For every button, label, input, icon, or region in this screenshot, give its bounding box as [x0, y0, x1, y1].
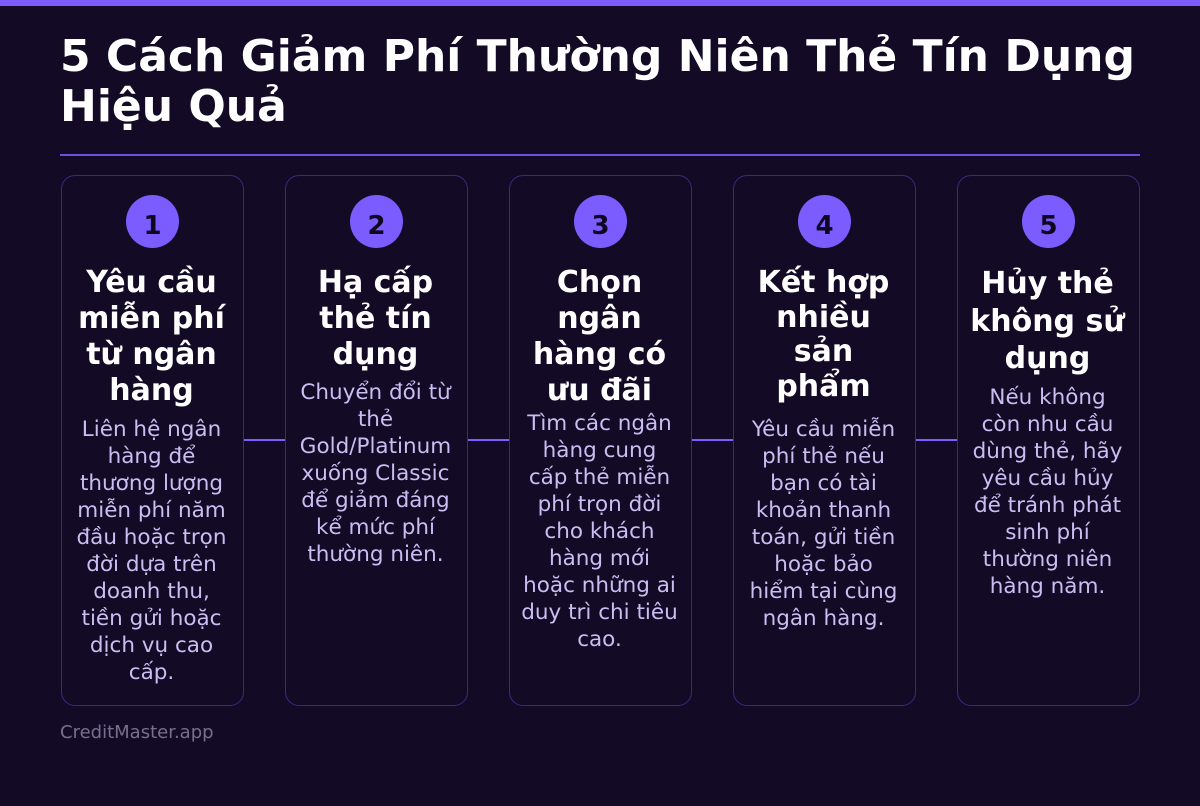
card 3 text: phí trọn đời — [538, 492, 661, 517]
panel: card 2 — [285, 175, 468, 706]
card 1 text: Liên hệ ngân — [82, 417, 221, 442]
card 1 text: thương lượng — [80, 471, 223, 496]
card 2 heading — [318, 265, 433, 372]
panel: card 5 — [957, 175, 1140, 706]
badge 5: 5 — [1039, 211, 1058, 241]
title — [60, 31, 1135, 132]
card 4 heading: sản — [794, 334, 853, 369]
card 1 heading: hàng — [109, 373, 194, 408]
card 1 heading: miễn phí — [78, 301, 225, 336]
card 1 text: miễn phí năm — [77, 498, 226, 523]
badge 3 — [574, 195, 627, 248]
card 5 heading — [970, 266, 1126, 376]
badge 5 — [1022, 195, 1075, 248]
panel: card 4 — [733, 175, 916, 706]
badge 1: 1 — [143, 211, 162, 241]
card 5 text: thường niên — [983, 547, 1112, 572]
card 1 text: cấp. — [129, 660, 174, 685]
card 1 text: hàng để — [108, 444, 195, 469]
card 5 text: dùng thẻ, hãy — [973, 439, 1122, 464]
card 2 text: thẻ — [358, 407, 393, 432]
badge 2 — [350, 195, 403, 248]
card 3 text: Tìm các ngân — [527, 411, 672, 436]
connector 1-2 — [244, 439, 285, 441]
card 4 text — [750, 417, 897, 631]
card 4 text: toán, gửi tiền — [752, 525, 895, 550]
card 5 heading: Hủy thẻ — [981, 266, 1114, 301]
card 3 heading: ngân — [557, 301, 642, 336]
card 4 heading: Kết hợp — [758, 265, 889, 300]
card 5 text: còn nhu cầu — [982, 412, 1113, 437]
card 3 text: hoặc những ai — [523, 573, 676, 598]
card 3 text: cấp thẻ miễn — [529, 465, 670, 490]
card 3 text: hàng mới — [549, 546, 650, 571]
card 1 text: doanh thu, — [93, 579, 210, 604]
card 4 text: hoặc bảo — [774, 552, 873, 577]
card 3 heading: hàng có — [533, 337, 666, 372]
card 2 text: Chuyển đổi từ — [300, 380, 451, 405]
card 5 text: yêu cầu hủy — [982, 466, 1113, 491]
card 5 heading: dụng — [1005, 341, 1090, 376]
card 4 text: phí thẻ nếu — [762, 444, 885, 469]
footer: CreditMaster.app — [60, 722, 214, 743]
card 2 text: Gold/Platinum — [300, 434, 451, 459]
card 2 text: kể mức phí — [316, 515, 435, 540]
card 4 heading — [758, 265, 889, 404]
card 5 text: để tránh phát — [974, 493, 1121, 518]
card 5 text: sinh phí — [1005, 520, 1090, 545]
badge 1 — [126, 195, 179, 248]
card 1 text: đời dựa trên — [86, 552, 217, 577]
panel: card 1 — [61, 175, 244, 706]
card 2 heading: dụng — [333, 337, 418, 372]
connector 4-5 — [916, 439, 957, 441]
card 5 text: Nếu không — [989, 385, 1106, 410]
card 1 text: tiền gửi hoặc — [82, 606, 221, 631]
card 5 heading: không sử — [970, 304, 1125, 338]
badge 4 — [798, 195, 851, 248]
card 1 heading: từ ngân — [86, 337, 217, 372]
title: 5 Cách Giảm Phí Thường Niên Thẻ Tín Dụng — [60, 31, 1135, 82]
card 4 text: Yêu cầu miễn — [752, 417, 895, 442]
title: Hiệu Quả — [60, 81, 287, 132]
panel: card 3 — [509, 175, 692, 706]
card 2 text — [300, 380, 452, 567]
card 2 text: xuống Classic — [302, 461, 449, 486]
card 4 heading: phẩm — [776, 368, 871, 404]
card 1 text — [77, 417, 226, 685]
card 2 heading: Hạ cấp — [318, 265, 433, 300]
card 3 text: cao. — [577, 627, 622, 652]
card 5 text: hàng năm. — [990, 574, 1105, 599]
card 3 text: hàng cung — [543, 438, 656, 463]
card 3 heading: ưu đãi — [547, 373, 652, 408]
card 2 text: thường niên. — [307, 542, 444, 567]
badge 3: 3 — [591, 211, 610, 241]
connector 2-3 — [468, 439, 509, 441]
card 1 text: đầu hoặc trọn — [77, 525, 226, 550]
card 3 heading — [533, 265, 666, 408]
card 1 text: dịch vụ cao — [90, 633, 213, 658]
card 1 heading: Yêu cầu — [86, 265, 217, 300]
badge 2: 2 — [367, 211, 386, 241]
card 2 heading: thẻ tín — [319, 301, 432, 336]
connector 3-4 — [692, 439, 733, 441]
card 4 heading: nhiều — [776, 300, 871, 334]
card 3 text — [521, 411, 678, 652]
card 3 text: cho khách — [544, 519, 655, 544]
card 4 text: bạn có tài — [770, 471, 877, 496]
card 3 heading: Chọn — [557, 265, 642, 300]
card 4 text: hiểm tại cùng — [750, 579, 897, 604]
card 1 heading — [78, 265, 226, 408]
card 4 text: ngân hàng. — [763, 606, 884, 631]
badge 4: 4 — [815, 211, 834, 241]
card 2 text: để giảm đáng — [301, 488, 450, 513]
card 5 text — [973, 385, 1122, 599]
card 3 text: duy trì chi tiêu — [521, 600, 678, 625]
card 4 text: khoản thanh — [756, 498, 891, 523]
